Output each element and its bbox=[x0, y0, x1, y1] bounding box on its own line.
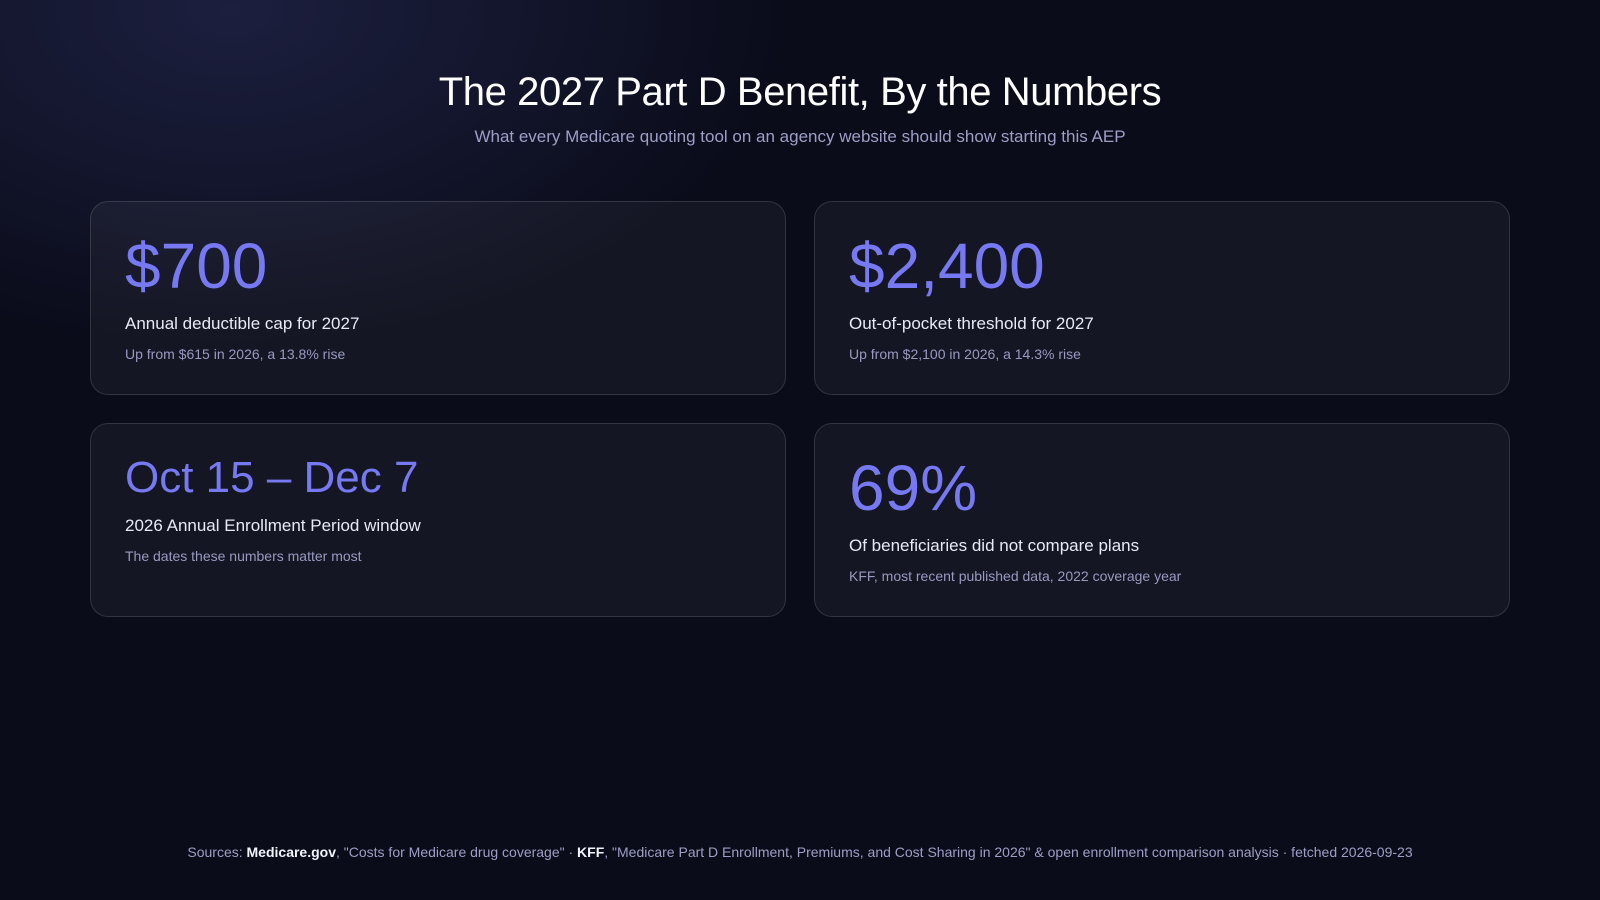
subtitle: What every Medicare quoting tool on an agency website should show starting this AEP bbox=[474, 127, 1126, 146]
stat note: threshold: Up from $2,100 in 2026, a 14.3% rise bbox=[849, 346, 1081, 362]
stat label: threshold: Out-of-pocket threshold for 2027 bbox=[849, 314, 1094, 333]
stat note: enrollment: The dates these numbers matter most bbox=[125, 548, 362, 564]
sources footer: Sources: Medicare.gov, "Costs for Medicare drug coverage" · KFF, "Medicare Part D Enrollment, Premiums, and Cost Sharing in 2026" & open enrollment comparison analysis · fetched 2026-09-23 bbox=[187, 844, 1413, 860]
stat value: dates: Oct 15 – Dec 7 bbox=[125, 453, 418, 502]
stat label: compare: Of beneficiaries did not compare plans bbox=[849, 536, 1139, 555]
stat value: 69%: 69% bbox=[849, 452, 977, 524]
stat note: deductible: Up from $615 in 2026, a 13.8% rise bbox=[125, 346, 345, 362]
stat value: $2,400: $2,400 bbox=[849, 230, 1045, 302]
panel: did not compare bbox=[814, 423, 1510, 617]
panel: enrollment window bbox=[90, 423, 786, 617]
panel: deductible cap bbox=[90, 201, 786, 395]
stat value: $700: $700 bbox=[125, 230, 267, 302]
stat label: deductible: Annual deductible cap for 2027 bbox=[125, 314, 359, 333]
stat label: enrollment: 2026 Annual Enrollment Period window bbox=[125, 516, 421, 535]
stat note: compare: KFF, most recent published data, 2022 coverage year bbox=[849, 568, 1181, 584]
title: The 2027 Part D Benefit, By the Numbers bbox=[439, 70, 1161, 114]
panel: out-of-pocket threshold bbox=[814, 201, 1510, 395]
